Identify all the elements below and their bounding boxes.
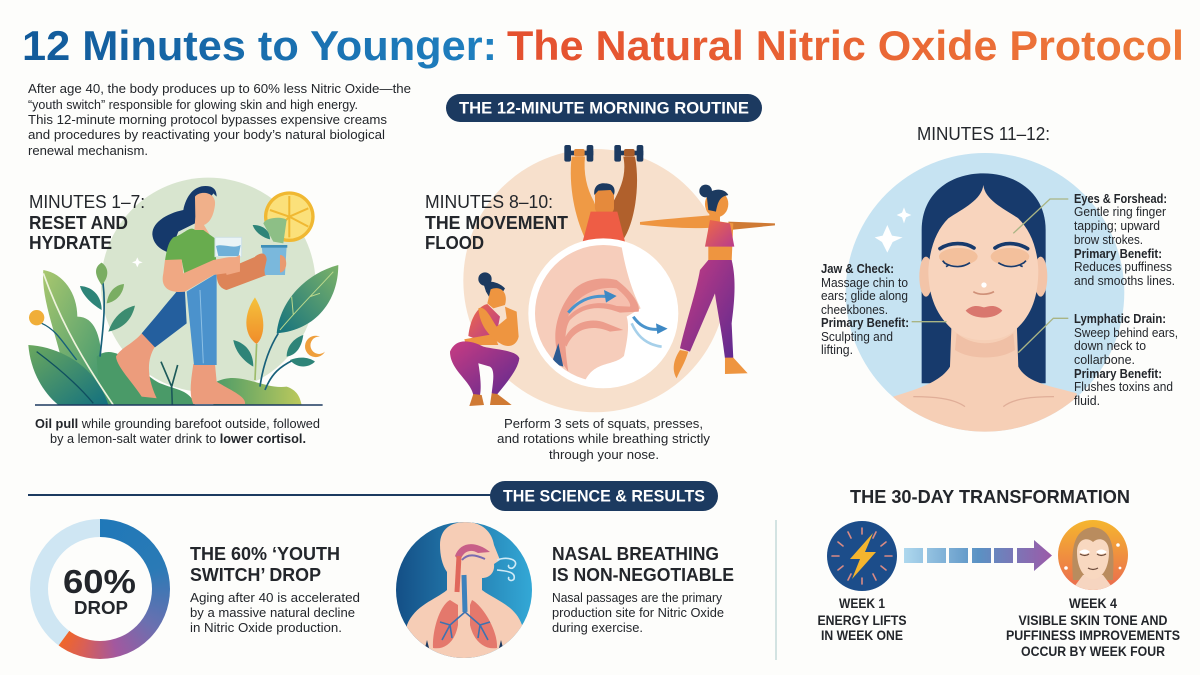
panel: minutes 11-12 (821, 124, 1178, 433)
text block: nasal breathing (552, 544, 734, 635)
caption: minutes 1-7: Oil pull while grounding barefoot outside, followed (35, 416, 320, 431)
heading: 30-day transformation: THE 30-DAY TRANSFORMATION (850, 487, 1130, 507)
heading: minutes 8-10: FLOOD (425, 233, 484, 253)
heading: minutes 8-10 (425, 192, 568, 253)
callout: lymphatic drain: collarbone. (1074, 353, 1135, 367)
callout: lymphatic drain: Sweep behind ears, (1074, 326, 1178, 340)
callout: lymphatic drain: Lymphatic Drain: (1074, 312, 1166, 326)
callout: jaw and cheek: Sculpting and (821, 330, 893, 344)
callout: eyes and forehead: Reduces puffiness (1074, 260, 1172, 274)
donut label (63, 563, 136, 618)
text block: youth switch drop: by a massive natural decline (190, 606, 355, 620)
icon: week 4 glowing face (1058, 520, 1128, 595)
label: week 1: IN WEEK ONE (821, 628, 903, 643)
callout: lymphatic drain: Primary Benefit: (1074, 367, 1162, 381)
title: The Natural Nitric Oxide Protocol (507, 22, 1184, 69)
arrow: progression from week 1 to week 4 (904, 540, 1052, 571)
text block: youth switch drop: Aging after 40 is accelerated (190, 591, 360, 605)
label: week 4: PUFFINESS IMPROVEMENTS (1006, 628, 1180, 643)
callout: eyes and forehead: Primary Benefit: (1074, 247, 1162, 261)
label: week 1 (818, 596, 906, 643)
caption: minutes 8-10 (497, 416, 711, 462)
intro text block: After age 40, the body produces up to 60% less Nitric Oxide—the (28, 82, 411, 96)
text block: nasal breathing: Nasal passages are the primary (552, 591, 723, 605)
label: week 1: WEEK 1 (839, 596, 885, 611)
label: week 4: OCCUR BY WEEK FOUR (1021, 644, 1165, 659)
caption: minutes 1-7: by a lemon-salt water drink to lower cortisol. (50, 431, 306, 446)
donut label: DROP (74, 598, 128, 618)
section pill: morning routine: THE 12-MINUTE MORNING ROUTINE (459, 100, 749, 118)
heading: minutes 8-10: THE MOVEMENT (425, 213, 568, 233)
panel: minutes 8-10 (425, 145, 775, 462)
callout: eyes and forehead: Gentle ring finger (1074, 205, 1166, 219)
illustration: woman hydrating barefoot (28, 178, 338, 405)
callout: jaw and cheek: Jaw & Check: (821, 262, 894, 276)
label: week 4: VISIBLE SKIN TONE AND (1018, 613, 1168, 628)
callout: jaw and cheek: Massage chin to (821, 276, 908, 290)
callout: eyes and forehead (1074, 192, 1175, 288)
intro text block: and procedures by reactivating your body’s natural biological (28, 128, 385, 142)
label: week 1: ENERGY LIFTS (818, 613, 906, 628)
text block: youth switch drop: in Nitric Oxide production. (190, 621, 342, 635)
illustration: exercising figures and nasal breathing (450, 145, 775, 412)
text block: youth switch drop: SWITCH’ DROP (190, 565, 321, 585)
callout: jaw and cheek (821, 262, 909, 357)
icon: lungs and airway (396, 522, 532, 660)
heading: minutes 1-7 (29, 192, 145, 253)
text block: youth switch drop (190, 544, 360, 635)
caption: minutes 1-7 (35, 416, 320, 446)
text block: nasal breathing: NASAL BREATHING (552, 544, 719, 564)
intro text block: “youth switch” responsible for glowing skin and high energy. (28, 98, 358, 112)
heading: minutes 1-7: HYDRATE (29, 233, 112, 253)
label: week 4 (1006, 596, 1180, 659)
callout: lymphatic drain (1074, 312, 1178, 408)
caption: minutes 8-10: and rotations while breathing strictly (497, 431, 711, 446)
text block: nasal breathing: during exercise. (552, 621, 643, 635)
text block: nasal breathing: IS NON-NEGOTIABLE (552, 565, 734, 585)
caption: minutes 8-10: Perform 3 sets of squats, presses, (504, 416, 703, 431)
section heading: science and results: THE SCIENCE & RESULTS (503, 488, 705, 506)
callout: eyes and forehead: and smooths lines. (1074, 274, 1175, 288)
heading: minutes 1-7: MINUTES 1–7: (29, 192, 145, 212)
intro text block: This 12-minute morning protocol bypasses expensive creams (28, 113, 387, 127)
callout: lymphatic drain: Flushes toxins and (1074, 380, 1173, 394)
callout: jaw and cheek: ears; glide along (821, 289, 908, 303)
callout: jaw and cheek: cheekbones. (821, 303, 888, 317)
donut ring: 60% drop (30, 519, 170, 659)
text block: nasal breathing: production site for Nitric Oxide (552, 606, 724, 620)
panel: minutes 1-7 (28, 178, 338, 446)
callout: jaw and cheek: lifting. (821, 343, 853, 357)
heading: minutes 1-7: RESET AND (29, 213, 128, 233)
callout: eyes and forehead: brow strokes. (1074, 233, 1143, 247)
callout: lymphatic drain: fluid. (1074, 394, 1100, 408)
heading: minutes 8-10: MINUTES 8–10: (425, 192, 553, 212)
title: 12 Minutes to Younger: (22, 22, 497, 69)
heading: minutes 11-12: MINUTES 11–12: (917, 124, 1050, 144)
callout: jaw and cheek: Primary Benefit: (821, 316, 909, 330)
donut label: 60% (63, 563, 136, 600)
intro text block (28, 82, 411, 158)
callout: lymphatic drain: down neck to (1074, 339, 1146, 353)
caption: minutes 8-10: through your nose. (549, 447, 659, 462)
illustration: woman's face with closed eyes (846, 153, 1124, 433)
callout: eyes and forehead: tapping; upward (1074, 219, 1160, 233)
section heading: science and results (28, 481, 718, 511)
callout: eyes and forehead: Eyes & Forshead: (1074, 192, 1167, 206)
text block: youth switch drop: THE 60% ‘YOUTH (190, 544, 340, 564)
intro text block: renewal mechanism. (28, 144, 148, 158)
label: week 4: WEEK 4 (1069, 596, 1117, 611)
icon: week 1 energy bolt (827, 521, 897, 591)
section pill: morning routine (446, 94, 762, 122)
